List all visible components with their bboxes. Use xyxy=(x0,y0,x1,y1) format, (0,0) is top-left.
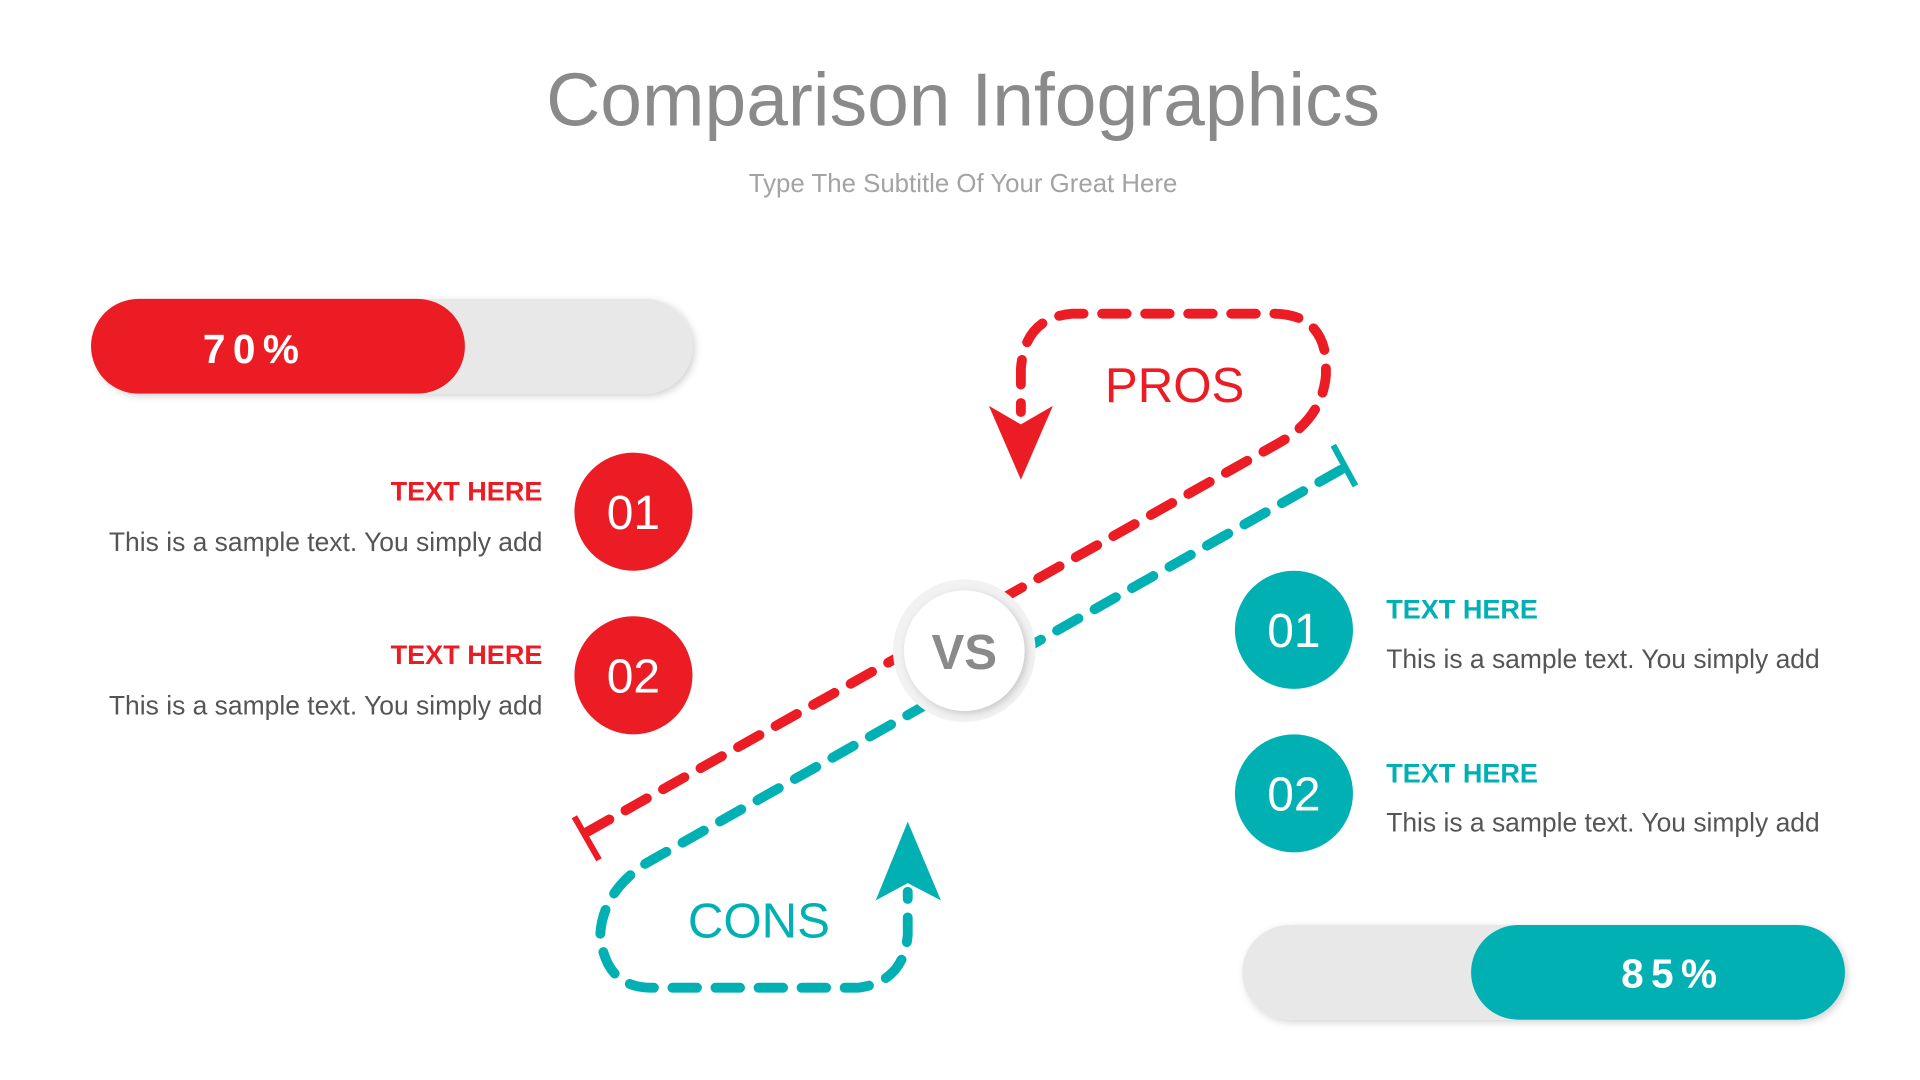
pros item 02: This is a sample text. You simply add xyxy=(109,691,542,721)
pros item 01: 01 xyxy=(607,487,660,540)
cons item 02: 02 xyxy=(1267,769,1321,822)
cons item 01: This is a sample text. You simply add xyxy=(1386,644,1820,674)
progress bar: 85% xyxy=(1242,925,1845,1020)
subtitle: Type The Subtitle Of Your Great Here xyxy=(749,170,1177,198)
pros item 01: TEXT HERE xyxy=(391,477,542,507)
progress bar: 85%: 85% xyxy=(1621,951,1724,997)
title: Comparison Infographics xyxy=(546,57,1380,141)
progress bar: 70% xyxy=(91,299,692,394)
cons item 02: This is a sample text. You simply add xyxy=(1386,808,1820,838)
cons item 01: 01 xyxy=(1267,605,1321,658)
progress bar: 70%: 70% xyxy=(203,326,306,372)
cons item 01 xyxy=(1235,571,1820,689)
cons item 01: TEXT HERE xyxy=(1386,595,1538,625)
VS badge: VS xyxy=(931,625,997,680)
pros item 02: TEXT HERE xyxy=(391,640,542,670)
VS badge xyxy=(893,579,1036,722)
arrow: cons dashed path: CONS xyxy=(688,893,830,948)
cons item 02 xyxy=(1235,734,1820,852)
pros item 02: 02 xyxy=(607,651,660,704)
pros item 01: This is a sample text. You simply add xyxy=(109,527,542,557)
arrow: pros dashed path: PROS xyxy=(1105,358,1244,413)
pros item 01 xyxy=(109,453,692,571)
cons item 02: TEXT HERE xyxy=(1386,758,1538,788)
pros item 02 xyxy=(109,616,692,734)
arrow: pros dashed path xyxy=(574,314,1326,860)
arrow: cons dashed path xyxy=(600,445,1355,988)
